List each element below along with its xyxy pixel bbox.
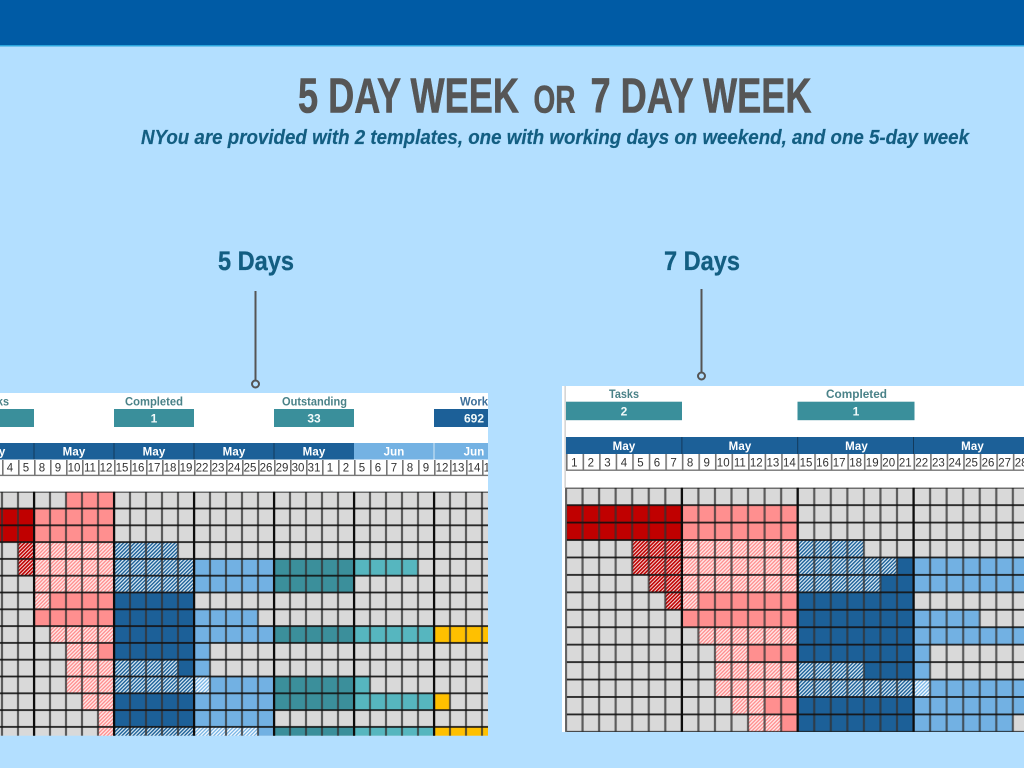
day number row: 21 bbox=[899, 458, 912, 470]
day number row: 31 bbox=[308, 463, 320, 475]
title: OR bbox=[534, 78, 576, 122]
day number row: 16 bbox=[132, 463, 144, 475]
month header row: Jun bbox=[464, 446, 484, 458]
stat: tasks bbox=[566, 387, 682, 420]
day number row: 1 bbox=[571, 458, 578, 470]
day number row: 15 bbox=[484, 463, 496, 475]
title: 5 DAY WEEK bbox=[298, 70, 519, 124]
heading: 7 days: 7 Days bbox=[664, 246, 740, 276]
day number row: 20 bbox=[882, 458, 895, 470]
day number row bbox=[566, 454, 1024, 471]
panel: 7 day gantt chart bbox=[562, 386, 1024, 732]
stat: completed bbox=[798, 387, 914, 420]
day number row: 14 bbox=[468, 463, 481, 475]
day number row: 2 bbox=[343, 463, 349, 475]
day number row: 26 bbox=[982, 458, 994, 470]
pointer: 5 days bbox=[252, 291, 259, 388]
day number row: 22 bbox=[196, 463, 208, 475]
day number row: 13 bbox=[767, 458, 779, 470]
day number row: 8 bbox=[687, 458, 693, 470]
day number row: 30 bbox=[292, 463, 304, 475]
day number row: 15 bbox=[800, 458, 812, 470]
day number row: 6 bbox=[654, 458, 660, 470]
day number row: 15 bbox=[116, 463, 128, 475]
day number row: 23 bbox=[932, 458, 945, 470]
day number row: 25 bbox=[965, 458, 978, 470]
day number row: 10 bbox=[68, 463, 80, 475]
month header row: May bbox=[223, 446, 246, 458]
schedule grid bbox=[0, 492, 488, 736]
day number row: 4 bbox=[7, 463, 14, 475]
day number row: 14 bbox=[783, 458, 796, 470]
month header row bbox=[566, 437, 1024, 454]
month header row: May bbox=[961, 441, 984, 453]
day number row: 4 bbox=[621, 458, 628, 470]
stat: completed: 1 bbox=[853, 404, 860, 418]
day number row: 9 bbox=[423, 463, 429, 475]
day number row: 12 bbox=[436, 463, 448, 475]
day number row: 13 bbox=[452, 463, 464, 475]
day number row: 19 bbox=[866, 458, 879, 470]
stat: completed: 1 bbox=[151, 412, 158, 426]
stat: outstanding: Outstanding bbox=[282, 394, 347, 408]
day number row: 22 bbox=[915, 458, 928, 470]
month header row: May bbox=[303, 446, 326, 458]
day number row: 26 bbox=[260, 463, 272, 475]
day number row: 19 bbox=[180, 463, 192, 475]
day number row: 5 bbox=[23, 463, 29, 475]
day number row: 9 bbox=[703, 458, 710, 470]
month header row: May bbox=[613, 441, 636, 453]
schedule grid bbox=[565, 488, 1024, 732]
header bar bbox=[0, 0, 1024, 46]
day number row: 17 bbox=[148, 463, 160, 475]
day number row: 11 bbox=[734, 458, 746, 470]
stat: completed: Completed bbox=[125, 394, 183, 408]
stat: work: 692 bbox=[464, 412, 484, 426]
panel: 5 day gantt chart bbox=[0, 393, 496, 736]
day number row: 11 bbox=[84, 463, 96, 475]
stat: tasks bbox=[0, 399, 34, 427]
month header row: May bbox=[729, 441, 752, 453]
stat: work bbox=[434, 394, 488, 427]
stat: outstanding bbox=[274, 394, 354, 427]
day number row: 27 bbox=[998, 458, 1011, 470]
day number row: 1 bbox=[327, 463, 333, 475]
day number row: 25 bbox=[244, 463, 256, 475]
stat: outstanding: 33 bbox=[307, 412, 321, 426]
day number row: 2 bbox=[588, 458, 594, 470]
title: 7 DAY WEEK bbox=[590, 70, 812, 124]
heading: 5 days: 5 Days bbox=[218, 246, 294, 276]
title bbox=[298, 70, 812, 124]
month header row: May bbox=[845, 441, 868, 453]
day number row: 24 bbox=[949, 458, 962, 470]
month header row bbox=[0, 443, 488, 460]
day number row: 18 bbox=[849, 458, 862, 470]
day number row: 7 bbox=[391, 463, 397, 475]
stat: work: Work bbox=[460, 394, 488, 408]
day number row: 18 bbox=[164, 463, 176, 475]
day number row: 17 bbox=[833, 458, 845, 470]
day number row: 5 bbox=[637, 458, 644, 470]
day number row: 23 bbox=[212, 463, 224, 475]
day number row: 3 bbox=[604, 458, 611, 470]
month header row: May bbox=[63, 446, 86, 458]
day number row: 9 bbox=[55, 463, 61, 475]
day number row bbox=[0, 460, 496, 476]
stat: tasks: 2 bbox=[621, 404, 628, 418]
day number row: 5 bbox=[359, 463, 365, 475]
day number row: 24 bbox=[228, 463, 241, 475]
month header row: Jun bbox=[384, 446, 404, 458]
day number row: 6 bbox=[375, 463, 381, 475]
pointer: 7 days bbox=[698, 289, 705, 380]
day number row: 16 bbox=[816, 458, 829, 470]
day number row: 12 bbox=[750, 458, 763, 470]
stat: completed: Completed bbox=[826, 387, 887, 401]
day number row: 12 bbox=[100, 463, 112, 475]
day number row: 8 bbox=[407, 463, 413, 475]
month header row: May bbox=[143, 446, 166, 458]
day number row: 7 bbox=[670, 458, 677, 470]
day number row: 10 bbox=[717, 458, 730, 470]
day number row: 8 bbox=[39, 463, 45, 475]
stat: tasks: Tasks bbox=[609, 387, 639, 401]
subtitle: NYou are provided with 2 templates, one with working days on weekend, and one 5-day week bbox=[141, 126, 970, 149]
day number row: 29 bbox=[276, 463, 288, 475]
stat: completed bbox=[114, 394, 194, 427]
